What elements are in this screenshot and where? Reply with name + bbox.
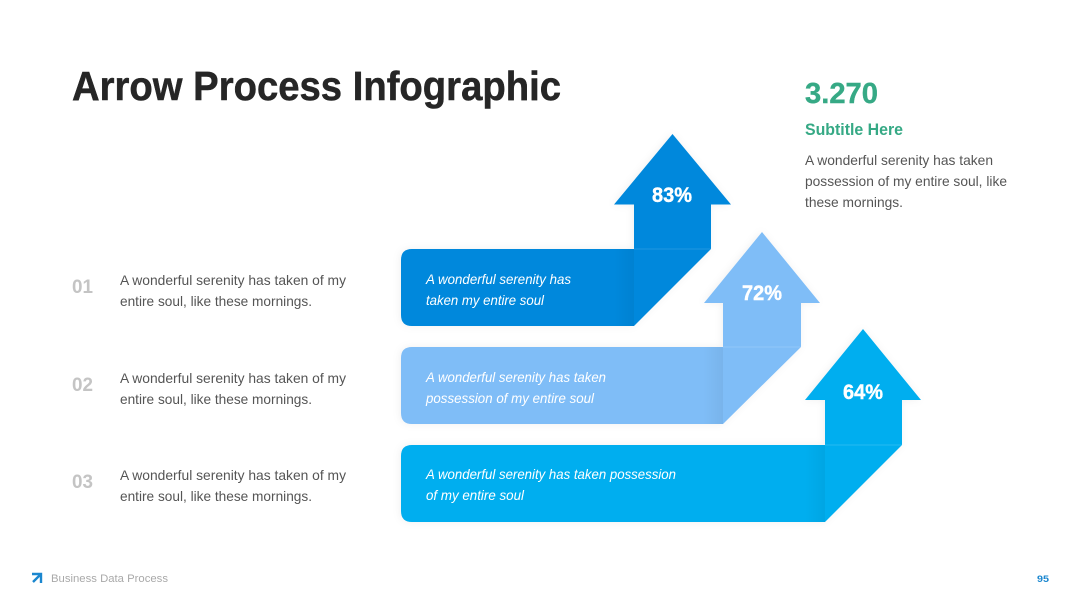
list item 03: 03 (72, 472, 93, 493)
stat number: 3.270 (805, 78, 878, 110)
arrow 2 percentage: 72% (742, 282, 782, 305)
arrow 1: 83% (401, 134, 731, 326)
arrow 2 text: possession of my entire soul (425, 390, 595, 406)
arrow 1 percentage: 83% (652, 184, 692, 207)
list item 01: A wonderful serenity has taken of my (120, 272, 346, 288)
list item 03 (72, 467, 346, 504)
footer (32, 573, 169, 585)
stat panel (805, 78, 1007, 210)
list item 03: A wonderful serenity has taken of my (120, 467, 346, 483)
list item 02: entire soul, like these mornings. (120, 391, 312, 407)
stat description: possession of my entire soul, like (805, 173, 1007, 189)
list item 01: entire soul, like these mornings. (120, 293, 312, 309)
list item 02 (72, 370, 346, 407)
arrow 3 text (425, 466, 676, 503)
icon: footer arrow (32, 574, 41, 583)
stat description: these mornings. (805, 194, 903, 210)
arrow 1 text: A wonderful serenity has (425, 271, 571, 287)
list item 01 (72, 272, 346, 309)
list item 03: entire soul, like these mornings. (120, 488, 312, 504)
page number: 95 (1037, 574, 1049, 584)
stat description (805, 152, 1007, 210)
arrow 1 text: taken my entire soul (426, 292, 545, 308)
stat description: A wonderful serenity has taken (805, 152, 993, 168)
arrow 2 text: A wonderful serenity has taken (425, 369, 606, 385)
arrow 3 text: of my entire soul (426, 487, 525, 503)
list item 02: 02 (72, 375, 93, 396)
title: Arrow Process Infographic (72, 63, 561, 109)
footer label: Business Data Process (51, 573, 169, 585)
arrow 3 percentage: 64% (843, 381, 883, 404)
list item 02: A wonderful serenity has taken of my (120, 370, 346, 386)
arrow 2 text (425, 369, 606, 406)
arrow 1 text (425, 271, 571, 308)
arrow 3: 64% (401, 329, 921, 522)
list item 01: 01 (72, 277, 93, 298)
stat subtitle: Subtitle Here (805, 121, 903, 139)
arrow 3 text: A wonderful serenity has taken possession (425, 466, 676, 482)
arrow 2: 72% (401, 232, 820, 424)
